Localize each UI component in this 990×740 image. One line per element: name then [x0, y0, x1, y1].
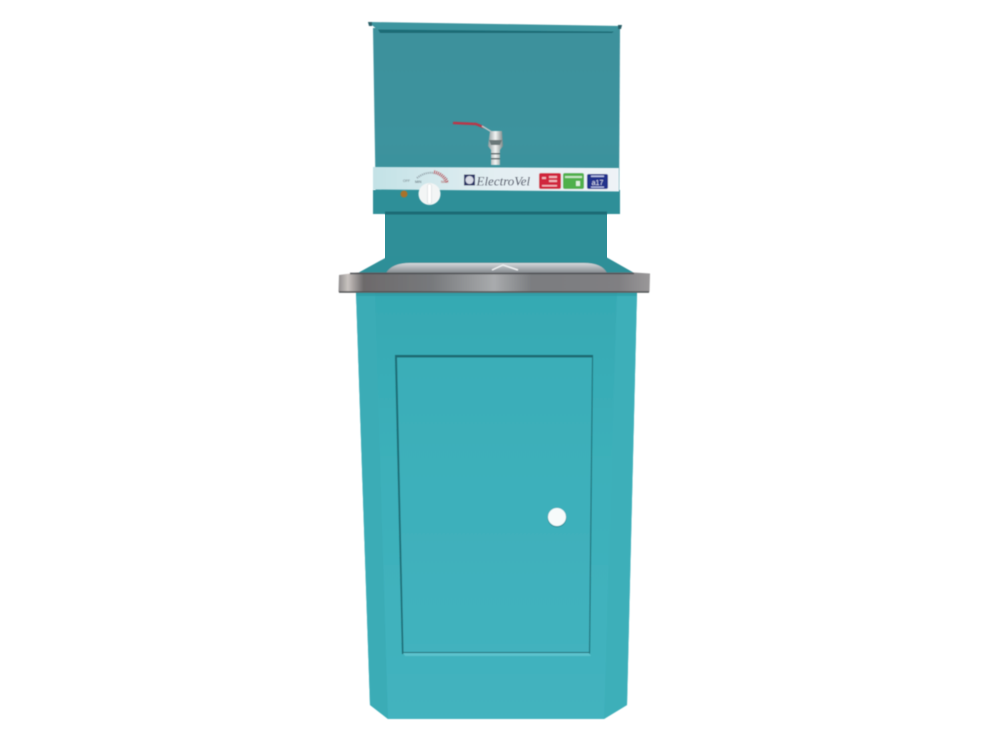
backsplash	[385, 212, 607, 260]
blue badge	[587, 174, 608, 189]
sink	[338, 257, 650, 292]
cabinet door	[395, 355, 593, 656]
left side panel	[356, 292, 388, 719]
cabinet base	[356, 292, 637, 719]
red badge	[539, 173, 561, 189]
door knob	[548, 508, 566, 528]
tank lid	[368, 22, 622, 33]
tap handle	[454, 123, 483, 127]
temperature dial scale	[403, 172, 449, 184]
steel front rim	[338, 272, 650, 292]
indicator lamp	[400, 190, 408, 198]
control band	[373, 167, 619, 205]
brand name: ElectroVel	[476, 174, 531, 188]
blue badge: a17	[592, 180, 603, 187]
thermostat knob	[418, 183, 440, 205]
temperature dial scale: MIN	[415, 180, 422, 184]
water tank	[368, 22, 622, 214]
temperature dial scale: OFF	[403, 179, 410, 183]
temperature dial scale: MAX	[441, 180, 449, 184]
green badge	[563, 173, 584, 189]
right side panel	[604, 292, 637, 719]
sink bowl	[386, 263, 607, 273]
logo mark	[464, 174, 475, 186]
sink deck	[356, 257, 636, 274]
water tap	[454, 123, 503, 165]
tap body	[488, 131, 503, 165]
